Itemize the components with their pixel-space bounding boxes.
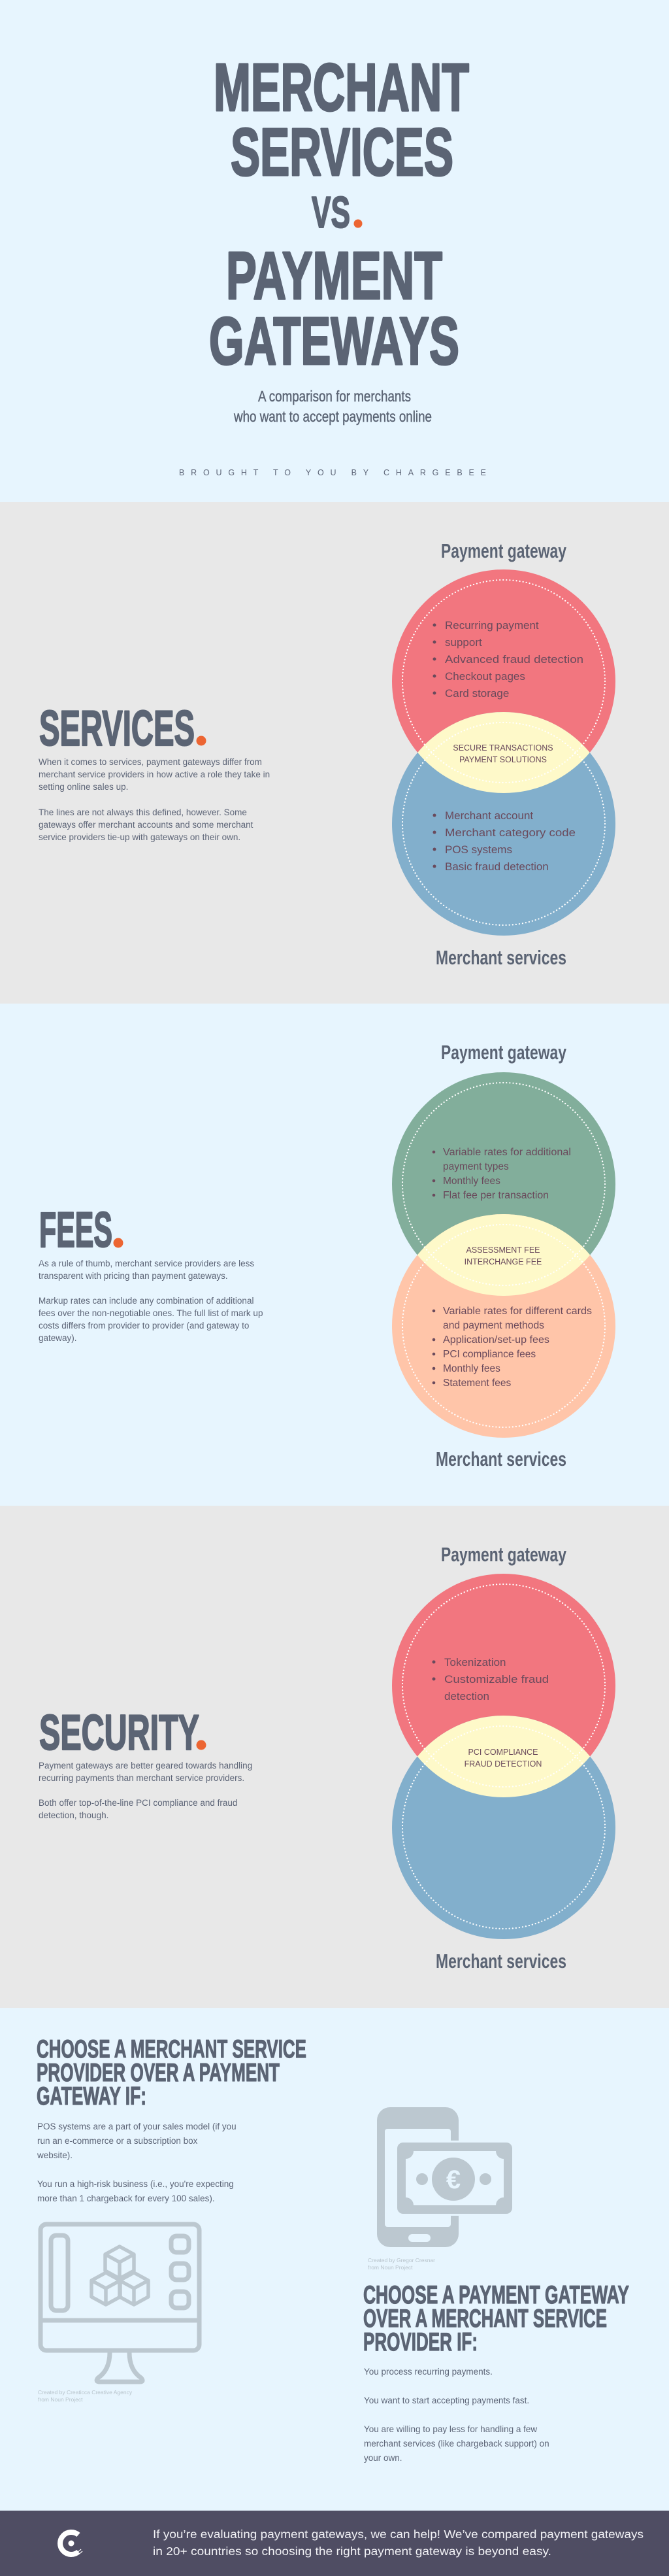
- venn diagram: fees: payment types: [443, 1161, 509, 1172]
- heading: choose gateway: PROVIDER IF:: [363, 2328, 478, 2356]
- icon credit: computer: Created by Creaticca Creative Agency: [38, 2389, 133, 2396]
- heading: services: [39, 701, 206, 756]
- venn diagram: fees: Merchant services: [436, 1448, 566, 1470]
- venn diagram: fees: ASSESSMENT FEE: [466, 1246, 540, 1255]
- venn diagram: fees: PCI compliance fees: [443, 1349, 536, 1360]
- footer text: in 20+ countries so choosing the right payment gateway is beyond easy.: [153, 2545, 551, 2558]
- venn diagram: services: Recurring payment: [445, 619, 539, 632]
- venn diagram: fees: Variable rates for different cards: [443, 1306, 592, 1317]
- title: PAYMENT: [226, 238, 442, 313]
- venn diagram: fees: and payment methods: [443, 1320, 544, 1331]
- title: [209, 50, 469, 379]
- venn diagram: fees: INTERCHANGE FEE: [465, 1257, 542, 1266]
- text block: security: Payment gateways are better geared towards handling: [39, 1761, 252, 1771]
- icon: phone with banknote: €: [446, 2165, 461, 2194]
- footer text: [153, 2528, 644, 2558]
- venn diagram: services: Card storage: [445, 687, 509, 700]
- heading: services: SERVICES: [39, 701, 195, 756]
- text block: merchant reasons: POS systems are a part of your sales model (if you: [37, 2122, 237, 2131]
- venn diagram: services: support: [445, 636, 482, 649]
- icon: POS computer: [41, 2224, 199, 2382]
- text block: gateway reasons: You are willing to pay less for handling a few: [364, 2424, 537, 2434]
- venn diagram: fees: Variable rates for additional: [443, 1147, 571, 1158]
- venn diagram: services: PAYMENT SOLUTIONS: [459, 755, 547, 764]
- panel: choose merchant service provider: [37, 2035, 306, 2403]
- heading: choose merchant: [37, 2035, 306, 2110]
- venn diagram: services: POS systems: [445, 843, 512, 856]
- venn diagram: fees: [392, 1041, 615, 1470]
- venn diagram: fees: Payment gateway: [441, 1041, 567, 1064]
- venn diagram: services: Payment gateway: [441, 539, 567, 562]
- venn diagram: services: Basic fraud detection: [445, 860, 549, 873]
- text block: gateway reasons: You process recurring payments.: [364, 2367, 493, 2377]
- heading: fees: [39, 1202, 123, 1258]
- venn diagram: fees: Monthly fees: [443, 1363, 500, 1374]
- subtitle: [233, 388, 432, 425]
- text block: security: detection, though.: [39, 1810, 108, 1820]
- title: MERCHANT: [214, 50, 469, 125]
- venn diagram: fees: Statement fees: [443, 1378, 512, 1389]
- text block: merchant reasons: You run a high-risk business (i.e., you're expecting: [37, 2179, 234, 2189]
- venn diagram: security: Merchant services: [436, 1950, 566, 1973]
- text block: fees: Markup rates can include any combination of additional: [39, 1296, 253, 1306]
- text block: merchant reasons: more than 1 chargeback for every 100 sales).: [37, 2194, 215, 2203]
- text block: merchant reasons: run an e-commerce or a subscription box: [37, 2136, 198, 2146]
- text block: gateway reasons: You want to start accepting payments fast.: [364, 2396, 529, 2405]
- text block: services: merchant service providers in how active a role they take in: [39, 770, 270, 779]
- panel: choose payment gateway: [363, 2107, 629, 2463]
- text block: fees: [39, 1259, 263, 1343]
- venn diagram: services: Merchant services: [436, 946, 566, 969]
- subtitle: who want to accept payments online: [233, 408, 432, 425]
- icon credit: phone: Created by Gregor Cresnar: [368, 2257, 435, 2263]
- text block: services: The lines are not always this defined, however. Some: [39, 807, 247, 817]
- text block: fees: costs differs from provider to provider (and gateway to: [39, 1321, 249, 1330]
- text block: fees: gateway).: [39, 1333, 77, 1343]
- icon credit: computer: [38, 2389, 133, 2403]
- panel: services: [39, 539, 615, 969]
- text block: services: service providers tie-up with gateways on their own.: [39, 832, 240, 842]
- venn diagram: security: detection: [444, 1690, 489, 1703]
- icon credit: computer: from Noun Project: [38, 2396, 83, 2403]
- venn diagram: security: [392, 1543, 615, 1973]
- text block: security: Both offer top-of-the-line PCI compliance and fraud: [39, 1798, 237, 1808]
- venn diagram: security: Tokenization: [444, 1656, 506, 1669]
- venn diagram: services: Merchant account: [445, 809, 533, 822]
- text block: gateway reasons: your own.: [364, 2453, 402, 2463]
- venn diagram: fees: Application/set-up fees: [443, 1334, 549, 1346]
- icon credit: phone: from Noun Project: [368, 2264, 413, 2271]
- venn diagram: services: Checkout pages: [445, 670, 525, 683]
- heading: fees: FEES: [39, 1202, 112, 1258]
- text block: services: When it comes to services, payment gateways differ from: [39, 757, 262, 767]
- venn diagram: services: Merchant category code: [445, 826, 576, 839]
- text block: services: setting online sales up.: [39, 782, 128, 792]
- text block: fees: transparent with pricing than payment gateways.: [39, 1271, 228, 1281]
- icon credit: phone: [368, 2257, 435, 2271]
- subtitle: A comparison for merchants: [258, 388, 411, 405]
- title: VS: [312, 188, 350, 237]
- text block: fees: As a rule of thumb, merchant service providers are less: [39, 1259, 254, 1268]
- text block: security: recurring payments than merchant service providers.: [39, 1773, 244, 1783]
- icon: chargebee logo: [60, 2532, 82, 2555]
- venn diagram: security: FRAUD DETECTION: [465, 1759, 542, 1769]
- text block: merchant reasons: website).: [37, 2150, 73, 2160]
- venn diagram: fees: Monthly fees: [443, 1176, 500, 1187]
- venn diagram: services: SECURE TRANSACTIONS: [453, 743, 553, 753]
- heading: choose gateway: [363, 2281, 629, 2356]
- panel: fees: [39, 1041, 615, 1470]
- text block: services: gateways offer merchant accounts and some merchant: [39, 820, 253, 830]
- icon: phone with banknote: [377, 2107, 514, 2247]
- venn diagram: services: [392, 539, 615, 969]
- text block: merchant reasons: [37, 2122, 237, 2203]
- text block: gateway reasons: merchant services (like chargeback support) on: [364, 2439, 549, 2449]
- heading: choose merchant: CHOOSE A MERCHANT SERVICE: [37, 2035, 306, 2063]
- heading: choose merchant: GATEWAY IF:: [37, 2082, 146, 2110]
- panel: security: [39, 1543, 615, 1973]
- text block: fees: fees over the non-negotiable ones. The full list of mark up: [39, 1308, 263, 1318]
- text block: services: [39, 757, 270, 842]
- credit line: BROUGHT TO YOU BY CHARGEBEE: [179, 468, 486, 477]
- footer text: If you’re evaluating payment gateways, we can help! We’ve compared payment gateways: [153, 2528, 644, 2541]
- heading: security: [39, 1705, 206, 1761]
- text block: gateway reasons: [364, 2367, 549, 2463]
- venn diagram: security: Customizable fraud: [444, 1673, 549, 1686]
- heading: choose merchant: PROVIDER OVER A PAYMENT: [37, 2059, 280, 2087]
- venn diagram: fees: Flat fee per transaction: [443, 1190, 549, 1201]
- text block: security: [39, 1761, 252, 1820]
- title: SERVICES: [231, 114, 453, 190]
- venn diagram: security: PCI COMPLIANCE: [468, 1748, 538, 1757]
- venn diagram: services: Advanced fraud detection: [445, 653, 583, 666]
- heading: security: SECURITY: [39, 1705, 199, 1761]
- title: GATEWAYS: [209, 303, 459, 379]
- footer: [0, 2511, 669, 2576]
- venn diagram: security: Payment gateway: [441, 1543, 567, 1566]
